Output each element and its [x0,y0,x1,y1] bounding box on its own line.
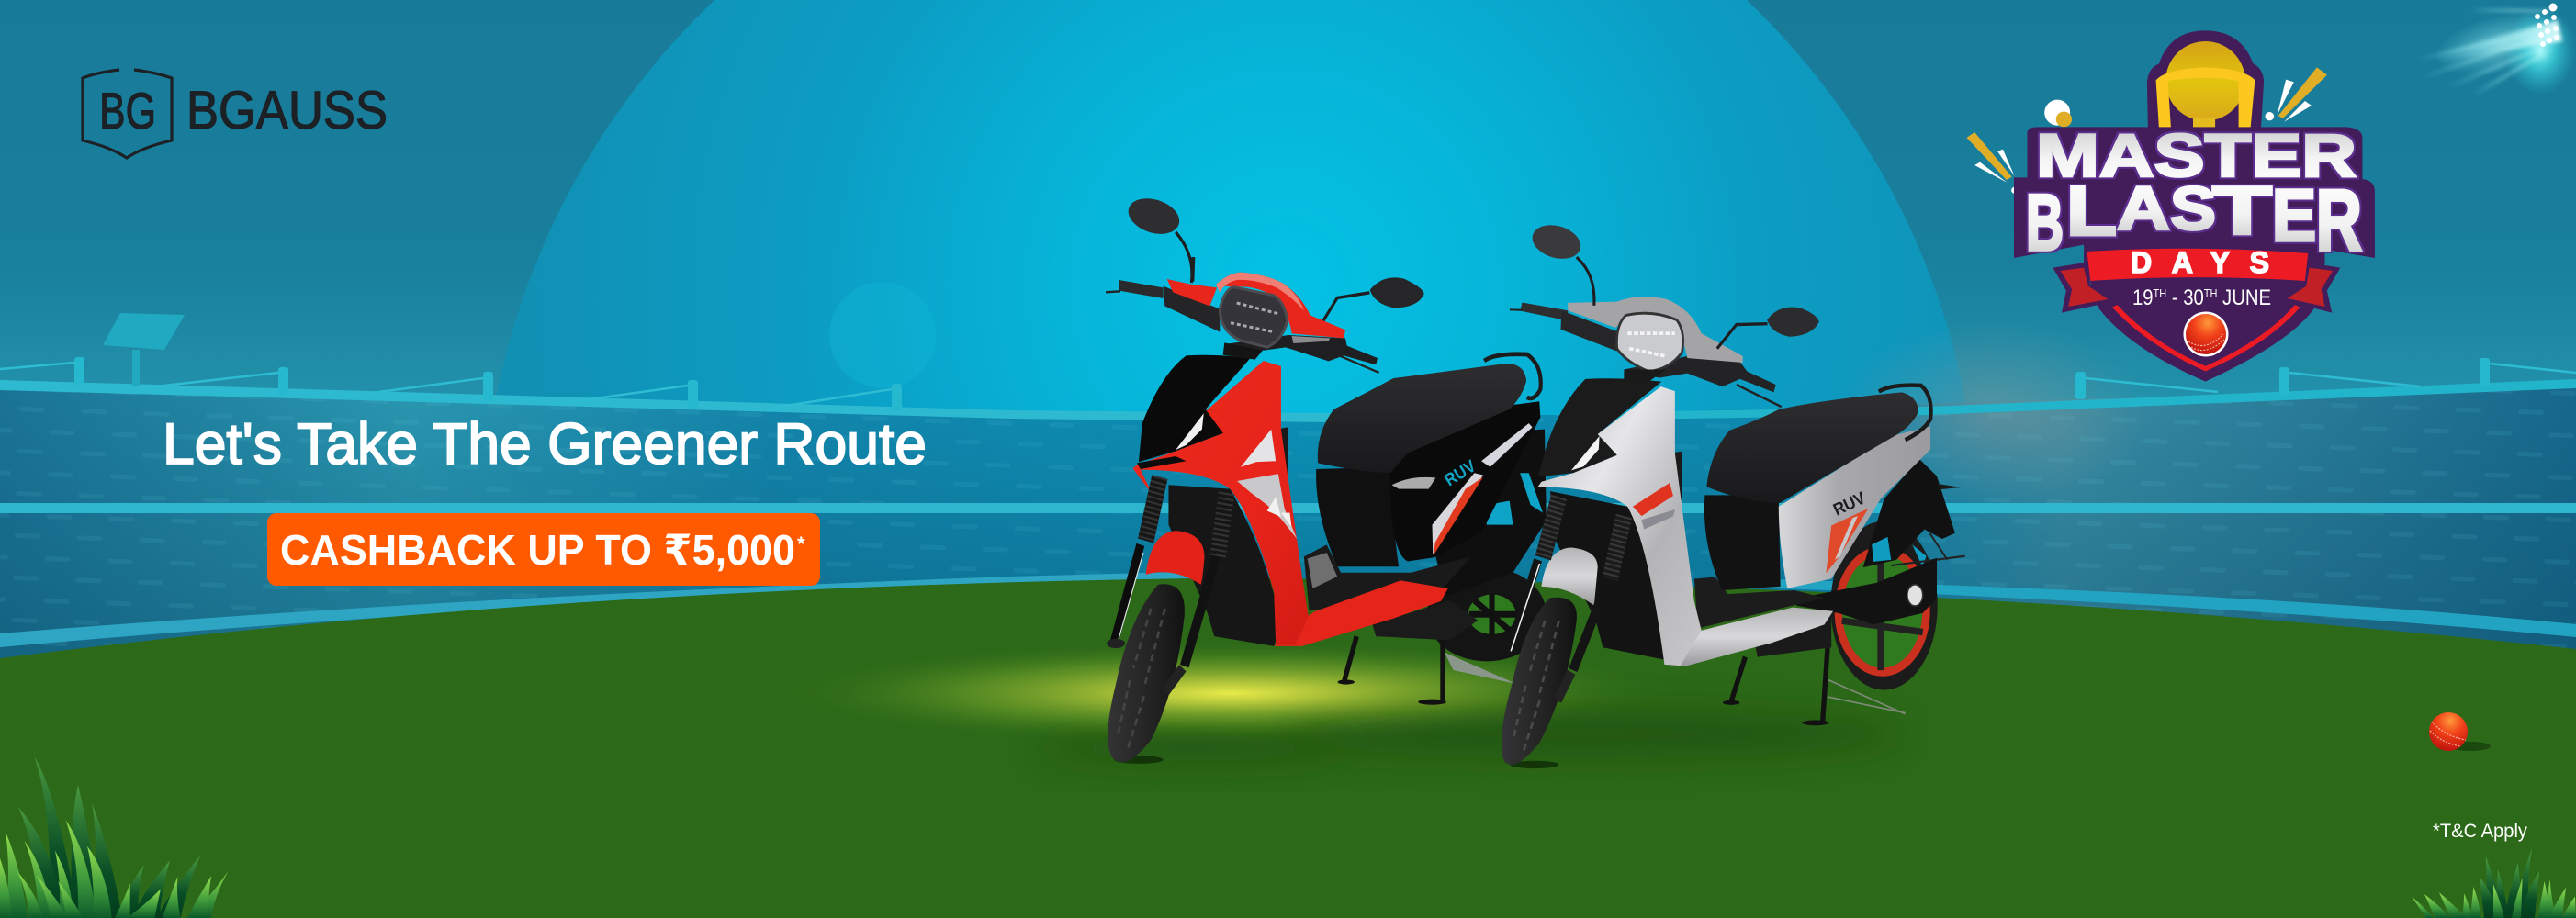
rear fender [1863,459,1955,567]
right mirror [1717,307,1819,349]
black floor [1694,577,1825,628]
mirror stem [1187,257,1198,282]
sparkles left [1966,132,2012,180]
scooter: red [1106,193,1547,764]
panel graphic [1241,430,1276,467]
under-seat body [1704,495,1781,590]
mechanism [1372,600,1478,640]
red cowl left [1167,279,1217,306]
left grip [1119,280,1164,298]
rear body [1390,401,1540,562]
left handlebar [1520,302,1568,320]
cashback button: * [797,532,805,555]
trophy cup [2165,41,2245,121]
left mirror [1125,193,1192,283]
grab rail [1879,386,1931,440]
rail left [0,380,1332,422]
grey panel [1445,652,1516,684]
badge: Master Blaster Days [1966,30,2375,382]
headlight lower strip [1137,456,1187,469]
red scooter body [1107,193,1547,764]
ground glow [771,640,1690,746]
front wheel [1502,598,1577,768]
stadium floodlight top right [2415,1,2576,95]
fork right [1218,493,1227,556]
warm glow on stand [1837,321,2149,505]
inner panel [1276,427,1288,485]
fork right [1610,516,1624,579]
stadium stand [0,313,2576,679]
headstock [1624,369,1666,382]
red front panel [1132,361,1309,645]
grass tuft left [0,756,228,918]
cashback button: CASHBACK UP TO ₹5,000 [280,526,795,574]
badge word BLASTER: S [2170,175,2216,243]
red scooter handlebars and lamp [1106,257,1379,373]
fork left [1509,560,1538,653]
trophy backing [2147,30,2264,131]
headline: Let's Take The Greener Route [163,412,927,476]
red chevron [2115,306,2298,369]
swing arm [1796,558,1937,624]
red fender [1146,531,1204,585]
badge dates: TH [2204,286,2217,300]
right mirror [1322,277,1424,324]
black floor [1304,544,1471,610]
logo shield [83,70,172,158]
silver fender [1541,548,1598,606]
curved lower bands [0,571,2576,647]
terms note: *T&C Apply [2433,821,2527,842]
silver front panel [1538,386,1702,666]
grey cowl [1568,297,1743,363]
inner panel [1670,452,1682,507]
badge word BLASTER: R [2316,173,2362,269]
black nose [1538,378,1661,476]
cashback button [267,513,820,586]
badge ball [2184,312,2228,356]
light rays [2415,7,2562,95]
decal [1826,509,1868,573]
hub [1907,585,1923,606]
green field [0,578,2576,918]
silver rear body [1779,427,1930,588]
left mirror [1529,220,1594,306]
red cowl top [1215,273,1345,338]
mechanism [1754,613,1831,657]
right bar [1224,335,1378,364]
rail right [1561,379,2576,420]
purple plate [2014,127,2375,382]
badge word MASTER: MASTER [2036,121,2357,189]
red cricket ball [2429,712,2491,751]
emblem [1633,483,1673,516]
badge dates: 19 [2132,285,2157,310]
seat [1318,364,1526,473]
scooter: silver [1502,220,1965,768]
front wheel [1108,584,1185,764]
headstock [1223,342,1263,360]
ground shadow [1038,711,1901,763]
fork left [1114,544,1141,643]
centre stand [1731,633,1828,722]
lower legshield [1550,491,1670,661]
trophy handles [2156,67,2255,128]
red underbody [1274,580,1448,646]
decal [1432,473,1483,554]
grass tuft right [2412,847,2576,918]
headlamp [1220,287,1288,347]
floodlight tower left [103,313,185,386]
lamp bulbs [2535,4,2559,47]
badge word BLASTER: E [2272,175,2316,257]
nose reflection [1176,413,1204,450]
badge shapes [1966,30,2375,382]
badge dates: - 30 [2166,285,2204,310]
carrier [1891,533,1965,565]
scooter decal text: silver: RUV [1830,488,1868,520]
nose reflection [1571,436,1600,470]
badge dates: TH [2154,286,2166,300]
right handlebar [1624,356,1776,392]
logo wordmark: BGAUSS [186,81,388,140]
under-seat body [1316,467,1399,566]
rail posts and cables [0,357,2576,411]
rear frame [1435,430,1547,597]
stadium dome glow [482,0,1979,588]
sparkles right [2278,67,2327,118]
badge word BLASTER [2026,173,2362,269]
silver underbody [1677,608,1833,666]
badge word BLASTER: T [2212,174,2272,249]
rear wheel [1427,567,1547,661]
lower legshield [1168,485,1281,646]
seat [1706,392,1918,503]
badge word BLASTER: L [2066,173,2117,250]
badge word BLASTER: A [2117,174,2170,243]
badge dates: JUNE [2217,285,2271,310]
grab rail [1484,354,1541,398]
headlamp [1616,313,1683,372]
black nose [1139,355,1250,462]
logo: BGAUSS [83,70,388,158]
scooter decal text: red: RUV [1441,456,1479,490]
left ribbon [2053,263,2115,313]
rear wheel [1830,521,1938,690]
centre stand [1344,636,1443,700]
badge word BLASTER: B [2026,179,2064,267]
days banner [2087,249,2308,281]
left housing [1164,286,1220,332]
right ribbon [2280,263,2340,313]
badge word DAYS: DAYS [2131,246,2269,279]
logo text BG: BG [99,82,156,140]
bokeh circle [829,282,936,388]
mid band [0,503,2576,513]
